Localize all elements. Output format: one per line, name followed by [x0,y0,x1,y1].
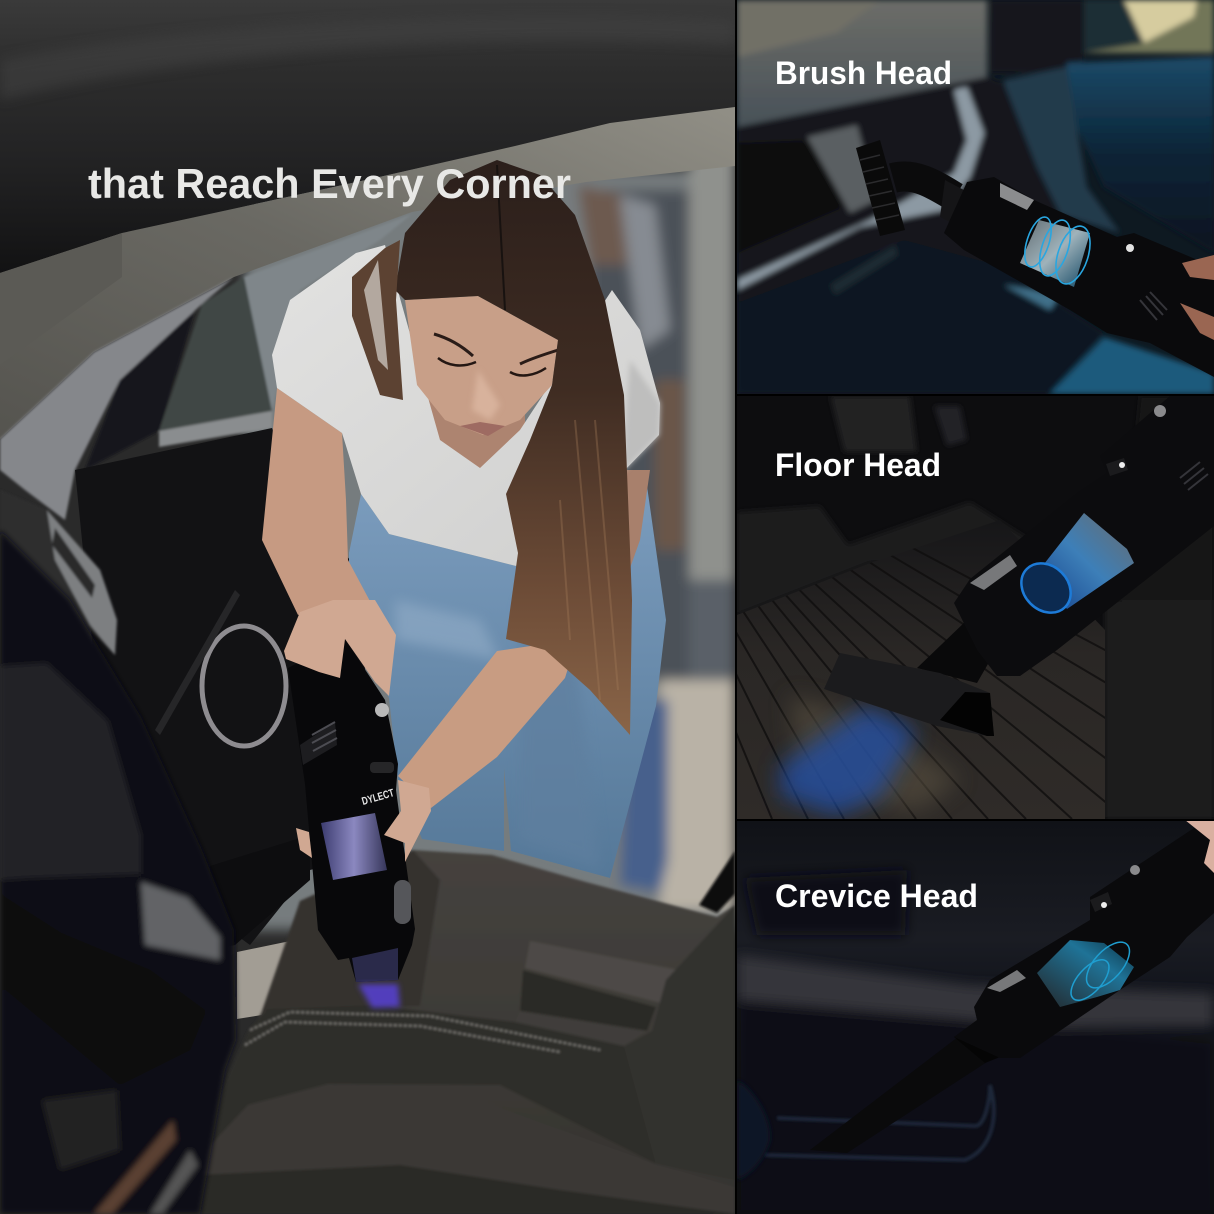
pedals and footwell [737,396,1214,819]
hands on the vacuum [284,600,431,862]
ribbed floor mat [737,548,1105,819]
panel: brush head [737,0,1214,394]
heading: Brush Head [775,55,952,91]
t-shirt [272,245,660,566]
brush bristles [856,140,905,236]
dashboard vent [45,510,118,656]
hand [1185,820,1214,873]
car roof lining [0,0,735,273]
left arm [262,388,372,615]
right forearm [398,639,577,808]
icon: vacuum with floor head [824,396,1214,736]
heading: Floor Head [775,447,941,483]
title: that Reach Every Corner [88,160,571,207]
woman [262,160,666,878]
blurred car interior [737,0,1214,394]
icon: vacuum with crevice nozzle [810,820,1214,1153]
panel: main photo of woman vacuuming a car seat [0,0,735,1214]
icon: vacuum with brush head [856,140,1214,377]
door interior with speaker ring [75,428,390,1019]
car seat [164,850,735,1214]
steering wheel [0,530,236,1214]
neck [428,400,525,468]
door pillar [0,107,735,439]
debris and blue light on the mat [780,696,960,816]
vacuum body [944,177,1214,377]
face [405,296,558,436]
heading: Crevice Head [775,878,978,914]
panel: crevice head [737,820,1214,1214]
panel: floor head [737,396,1214,819]
window glass [0,214,412,520]
blurred street background outside the car [244,150,735,930]
blurred door trim [737,870,1214,1214]
door pocket [765,1085,994,1160]
icon: handheld vacuum: DYLECT [361,787,396,808]
icon: handheld vacuum [288,639,415,1008]
hand [1182,255,1214,280]
hair [395,160,632,735]
jeans [349,486,666,878]
